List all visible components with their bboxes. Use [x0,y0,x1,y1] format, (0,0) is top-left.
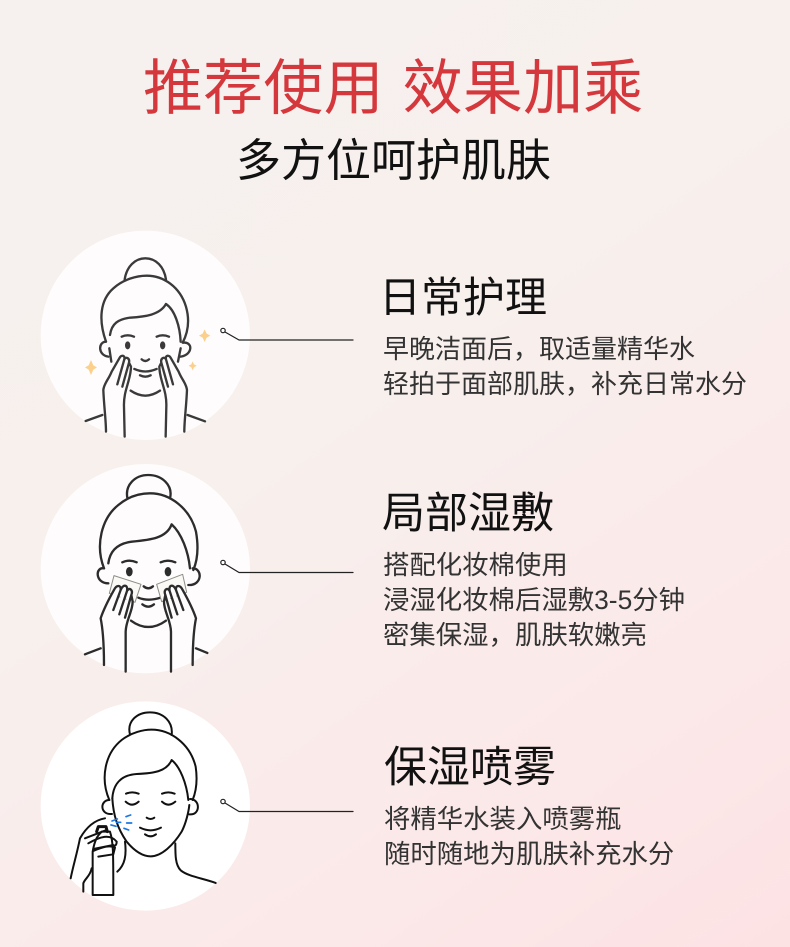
leader line: daily care [221,328,353,340]
text: spray: 将精华水装入喷雾瓶 [384,804,622,834]
heading: wet compress: 局部湿敷 [382,490,554,538]
panel: spray illustration [41,701,250,911]
text: wet compress: 搭配化妆棉使用 [383,550,568,580]
text: daily care: 早晚洁面后，取适量精华水 [383,334,695,364]
text: daily care: 轻拍于面部肌肤，补充日常水分 [383,368,747,398]
title: 推荐使用 效果加乘 [143,55,643,122]
panel: wet compress illustration [41,464,250,673]
text: wet compress: 密集保湿，肌肤软嫩亮 [383,620,647,650]
text: wet compress [383,550,685,650]
text: daily care [383,334,747,398]
panel: daily care illustration [41,231,250,440]
heading: spray: 保湿喷雾 [384,744,556,792]
subtitle: 多方位呵护肌肤 [236,135,551,186]
heading: daily care: 日常护理 [379,274,547,321]
leader line: spray [221,799,353,812]
text: spray [384,804,674,869]
text: wet compress: 浸湿化妆棉后湿敷3-5分钟 [383,585,685,615]
text: spray: 随时随地为肌肤补充水分 [384,839,674,869]
leader line: wet compress [221,560,353,572]
